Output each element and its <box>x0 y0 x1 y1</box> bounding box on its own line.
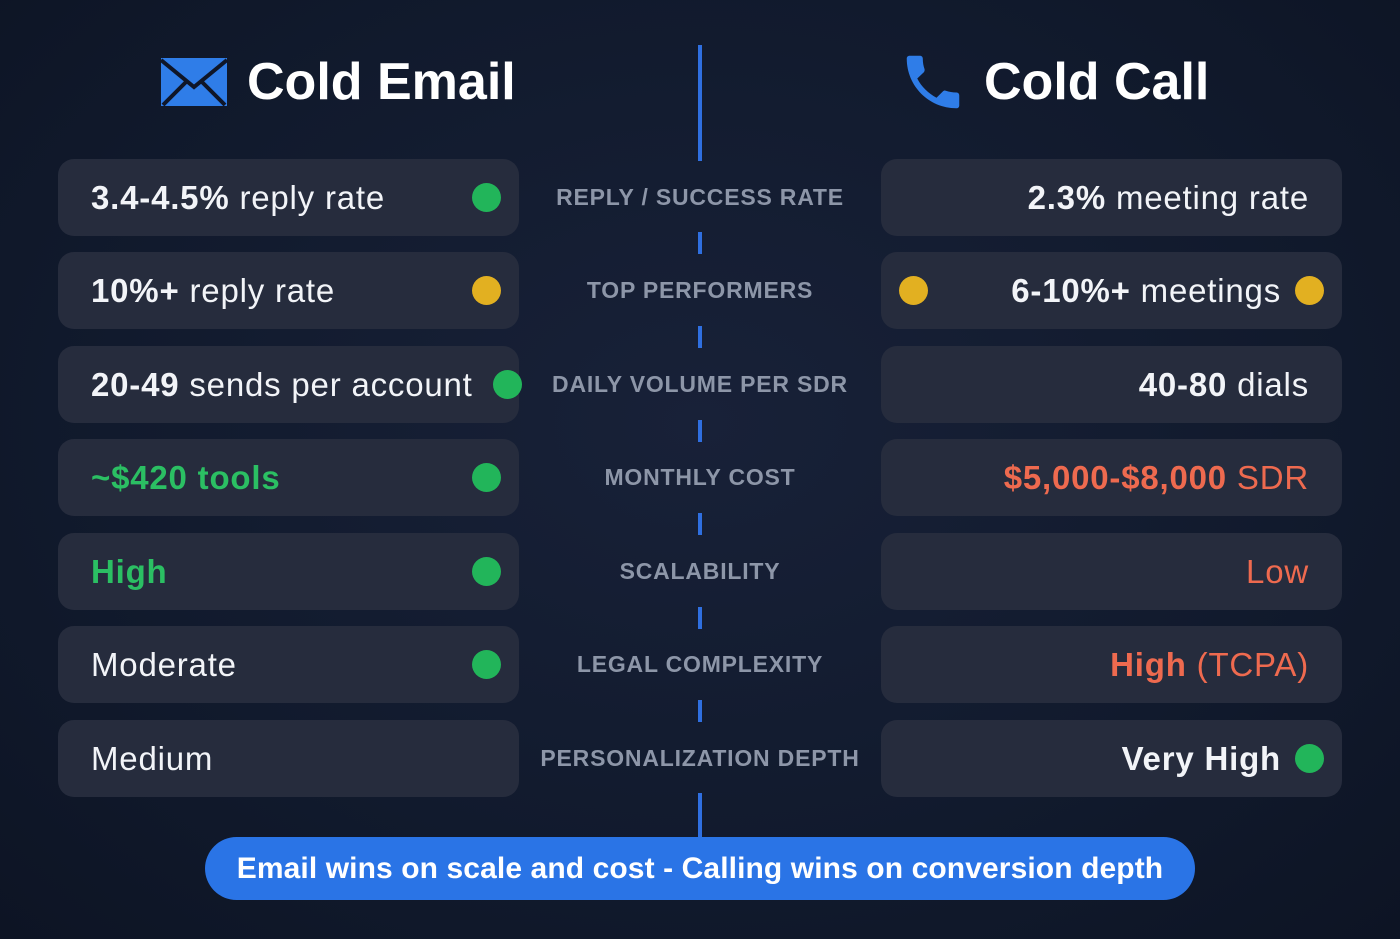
icon: envelope <box>161 58 227 106</box>
text: 6-10%+ meetings <box>1011 272 1281 308</box>
callout: summary: Email wins on scale and cost - Calling wins on conversion depth <box>237 852 1163 884</box>
callout: summary <box>205 837 1195 900</box>
row 1 <box>58 159 519 236</box>
row 1: 3.4-4.5% reply rate <box>91 178 385 216</box>
row 3 <box>58 346 519 423</box>
row 7 <box>58 720 519 797</box>
text: 2.3% meeting rate <box>1028 178 1309 216</box>
row 6: Moderate <box>91 646 237 682</box>
row 2 <box>58 252 519 329</box>
icon: phone <box>906 56 960 108</box>
text: REPLY / SUCCESS RATE <box>556 184 844 210</box>
text: PERSONALIZATION DEPTH <box>540 745 860 771</box>
row 4 <box>58 439 519 516</box>
text: DAILY VOLUME PER SDR <box>552 371 848 397</box>
text: TOP PERFORMERS <box>587 277 813 303</box>
text: High (TCPA) <box>1110 646 1309 682</box>
text: LEGAL COMPLEXITY <box>577 651 823 677</box>
row 5: High <box>91 552 168 590</box>
text: MONTHLY COST <box>604 464 796 490</box>
text: Low <box>1246 552 1309 590</box>
row 7: Medium <box>91 740 213 776</box>
row 2: 10%+ reply rate <box>91 272 335 308</box>
row 5 <box>58 533 519 610</box>
heading: Cold Call: Cold Call <box>984 53 1209 111</box>
text: SCALABILITY <box>620 558 780 584</box>
row 4: ~$420 tools <box>91 458 280 496</box>
row 3: 20-49 sends per account <box>91 366 473 402</box>
divider line <box>698 45 702 161</box>
text: $5,000-$8,000 SDR <box>1004 458 1309 496</box>
text: 40-80 dials <box>1139 366 1309 402</box>
text: Very High <box>1122 740 1281 776</box>
row 6 <box>58 626 519 703</box>
heading: Cold Email: Cold Email <box>247 53 516 111</box>
